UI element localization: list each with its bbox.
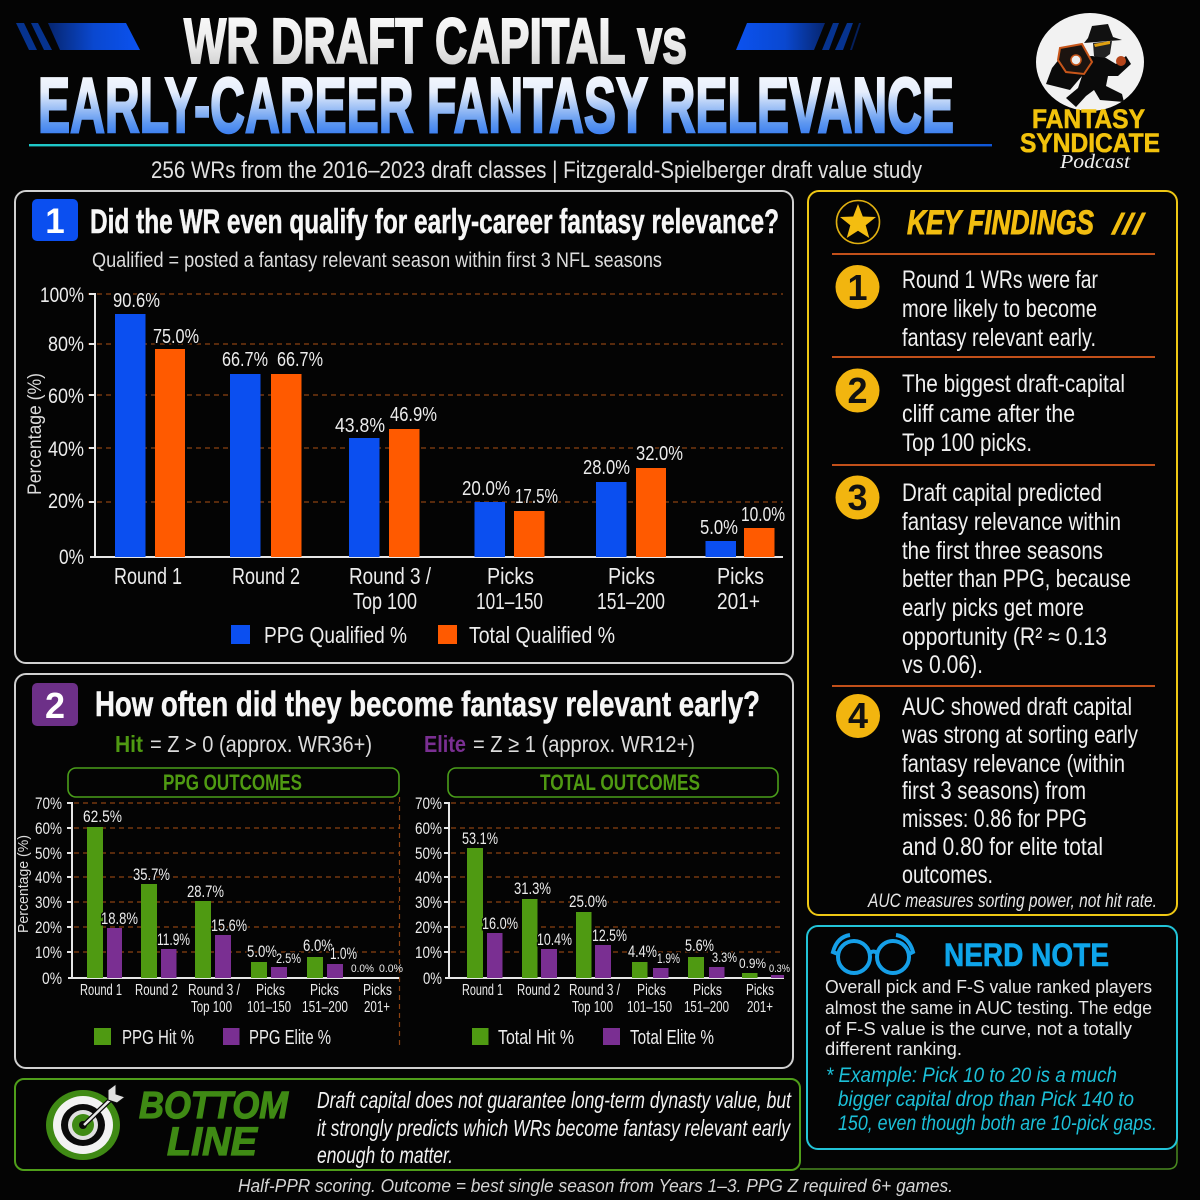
bar chart: PPG outcomes: 50% (35, 844, 62, 863)
bar chart: qualified percentages: 100% (40, 284, 84, 307)
bar chart: total outcomes: 50% (415, 844, 442, 863)
heading: bottom line (139, 1085, 289, 1164)
finding 1: more likely to become (902, 295, 1097, 323)
bar chart: total outcomes (415, 794, 790, 1016)
subtitle: 256 WRs from the 2016–2023 draft classes | Fitzgerald-Spielberger draft value study (151, 157, 922, 184)
bar chart: qualified percentages: Round 2 (232, 563, 300, 589)
finding 4: AUC showed draft capital (902, 693, 1132, 721)
bar chart: qualified percentages: 43.8% (335, 415, 385, 437)
bar chart: total outcomes: 20% (415, 918, 442, 937)
bar chart: qualified percentages: 60% (48, 385, 84, 408)
bar chart: total outcomes: 4.4% (628, 942, 657, 961)
bar chart: total outcomes: 40% (415, 868, 442, 887)
note body: different ranking. (825, 1039, 962, 1059)
bar chart: total outcomes: 16.0% (482, 914, 518, 933)
icon: running spy figure (1046, 24, 1131, 107)
bar chart: total outcomes: 30% (415, 893, 442, 912)
finding 3: vs 0.06). (902, 651, 983, 679)
finding 4: fantasy relevance (within (902, 750, 1125, 778)
bar chart: PPG outcomes: 40% (35, 868, 62, 887)
bar chart: PPG outcomes: Round 3 / (188, 982, 241, 999)
bar chart: qualified percentages: Round 3 / (349, 563, 431, 589)
bar chart: total outcomes: 70% (415, 794, 442, 813)
legend: total outcomes (472, 1027, 714, 1049)
panel: key findings (808, 191, 1177, 915)
bar chart: total outcomes: 0% (423, 969, 442, 988)
finding 1: Round 1 WRs were far (902, 266, 1098, 294)
note body: of F-S value is the curve, not a totally (825, 1019, 1132, 1039)
bar chart: qualified percentages: Picks (487, 563, 534, 589)
bottom line text: it strongly predicts which WRs become fantasy relevant early (317, 1115, 791, 1141)
bar chart: qualified percentages: Top 100 (353, 588, 417, 614)
icon: glasses (833, 935, 913, 973)
bar chart: PPG outcomes: 201+ (364, 999, 390, 1016)
decorative slashes: /// (1110, 208, 1146, 241)
bar chart: qualified percentages: 5.0% (700, 517, 738, 539)
finding 4: was strong at sorting early (901, 721, 1138, 749)
bar chart: qualified percentages: 101–150 (476, 588, 543, 614)
legend: PPG outcomes: PPG Hit % (122, 1027, 194, 1049)
bar chart: qualified percentages: Percentage (%) (25, 373, 46, 495)
finding 4: outcomes. (902, 861, 993, 889)
bar chart: qualified percentages: Picks (717, 563, 764, 589)
bar chart: total outcomes: Top 100 (572, 999, 613, 1016)
bar chart: total outcomes: 0.3% (769, 963, 790, 975)
bar chart: qualified percentages: 151–200 (597, 588, 665, 614)
bar chart: total outcomes: 151–200 (684, 999, 729, 1016)
bar chart: total outcomes: 201+ (747, 999, 773, 1016)
finding 2: The biggest draft-capital (902, 370, 1125, 398)
panel: bottom line (15, 1079, 1177, 1170)
chart legend (231, 622, 615, 648)
bar chart: PPG outcomes: 2.5% (276, 950, 301, 966)
bar chart: qualified percentages: Round 1 (114, 563, 182, 589)
bar chart: PPG outcomes: 35.7% (133, 865, 170, 884)
heading: section 2: How often did they become fantasy relevant early? (95, 685, 760, 724)
bar chart: PPG outcomes: 28.7% (187, 882, 224, 901)
bar chart: total outcomes: 3.3% (712, 949, 737, 965)
bar chart: qualified percentages: 80% (48, 333, 84, 356)
note body: Overall pick and F-S value ranked players (825, 977, 1152, 997)
bar chart: PPG outcomes: Round 2 (135, 982, 178, 999)
finding 3: Draft capital predicted (902, 479, 1102, 507)
note body (825, 977, 1152, 1059)
finding 2: Top 100 picks. (902, 429, 1032, 457)
finding 4 (836, 693, 1138, 889)
legend: total outcomes: Total Hit % (498, 1027, 574, 1049)
panel: hit and elite outcomes (15, 674, 793, 1068)
title underline (29, 144, 992, 146)
bottom line text (317, 1087, 792, 1168)
bar chart: qualified percentages: 28.0% (583, 457, 630, 479)
bar chart: PPG outcomes: 101–150 (247, 999, 291, 1016)
bar chart: qualified percentages: 66.7% (222, 349, 268, 371)
finding 4: 4 (848, 695, 868, 736)
bar chart: PPG outcomes: 11.9% (157, 930, 190, 949)
bar chart: qualified percentages: Picks (608, 563, 655, 589)
bar chart: qualified percentages: 90.6% (113, 290, 160, 312)
bar chart: qualified percentages: 46.9% (390, 404, 437, 426)
bar chart: qualified percentages: 75.0% (153, 326, 199, 348)
definition: hit: Hit (115, 731, 143, 757)
bar chart: qualified percentages: 40% (48, 438, 84, 461)
bar chart: PPG outcomes: 60% (35, 819, 62, 838)
bar chart: PPG outcomes: Percentage (%) (15, 835, 32, 933)
bar chart: total outcomes: 10.4% (537, 930, 572, 949)
bar chart: PPG outcomes (15, 794, 403, 1048)
bar chart: PPG outcomes: 151–200 (302, 999, 348, 1016)
finding 3: 3 (847, 477, 868, 518)
finding 3: the first three seasons (902, 537, 1103, 565)
bar chart: PPG outcomes: 20% (35, 918, 62, 937)
bottom line text: Draft capital does not guarantee long-term dynasty value, but (317, 1087, 792, 1113)
bar chart: total outcomes: 60% (415, 819, 442, 838)
bar chart: total outcomes: Picks (746, 982, 774, 999)
finding 1: fantasy relevant early. (902, 324, 1096, 352)
bar chart: PPG outcomes: Picks (256, 982, 285, 999)
heading: section 1: Did the WR even qualify for early-career fantasy relevance? (90, 203, 779, 241)
bar chart: PPG outcomes: 30% (35, 893, 62, 912)
heading: nerd note: NERD NOTE (944, 937, 1109, 973)
logo: Fantasy Syndicate Podcast: FANTASY (1032, 104, 1145, 134)
finding 3: fantasy relevance within (902, 508, 1121, 536)
bar chart: qualified percentages: 17.5% (515, 486, 558, 508)
header: right accent slashes (736, 23, 861, 50)
note example: * Example: Pick 10 to 20 is a much (826, 1064, 1117, 1087)
legend: PPG outcomes (94, 1027, 331, 1049)
badge: section 2 (32, 683, 78, 726)
bar chart: PPG outcomes: 0.0% (351, 963, 374, 975)
bar chart: total outcomes: 101–150 (627, 999, 672, 1016)
badge: section 1 (32, 199, 78, 241)
bar chart: total outcomes: 12.5% (592, 926, 627, 945)
bar chart: qualified percentages: 20.0% (462, 478, 510, 500)
bar chart: total outcomes: Round 1 (462, 982, 503, 999)
bar chart: qualified percentages: 66.7% (277, 349, 323, 371)
bar chart: PPG outcomes: 70% (35, 794, 62, 813)
bar chart: total outcomes: Picks (637, 982, 666, 999)
bar chart: total outcomes: 0.9% (739, 955, 766, 971)
finding 3: better than PPG, because (902, 565, 1131, 593)
bar chart: PPG outcomes: 1.0% (330, 944, 357, 963)
bar chart: PPG outcomes: 0.0% (379, 963, 403, 975)
finding 2: 2 (847, 370, 868, 411)
bar chart: qualified percentages: 0% (59, 546, 84, 569)
bar chart: qualified percentages: 201+ (717, 588, 760, 614)
legend: total outcomes: Total Elite % (630, 1027, 714, 1049)
bar chart: total outcomes: 10% (415, 943, 442, 962)
bottom line text: enough to matter. (317, 1142, 453, 1168)
bar chart: PPG outcomes: Top 100 (191, 999, 232, 1016)
logo: Fantasy Syndicate Podcast (1020, 13, 1160, 173)
finding 3 (836, 476, 1131, 679)
bar chart: total outcomes: 25.0% (569, 892, 607, 911)
bar chart: PPG outcomes: 10% (35, 943, 62, 962)
icon: target with arrow (46, 1084, 125, 1160)
definition: elite: Elite (424, 731, 466, 757)
note example (826, 1064, 1157, 1135)
note example: bigger capital drop than Pick 140 to (838, 1088, 1134, 1111)
chart legend: Total Qualified % (469, 622, 615, 648)
bar chart: total outcomes: 31.3% (514, 879, 551, 898)
finding 4: and 0.80 for elite total (902, 833, 1103, 861)
legend: PPG outcomes: PPG Elite % (249, 1027, 331, 1049)
bar chart: qualified percentages: 10.0% (741, 504, 785, 526)
bar chart: total outcomes: Picks (693, 982, 722, 999)
heading: bottom line: BOTTOM (139, 1085, 289, 1127)
subpanel: total outcomes header: TOTAL OUTCOMES (540, 770, 700, 795)
finding 4: misses: 0.86 for PPG (902, 805, 1087, 833)
finding 4: first 3 seasons) from (902, 777, 1086, 805)
bar chart: PPG outcomes: Picks (363, 982, 392, 999)
title (38, 5, 954, 149)
footer note: Half-PPR scoring. Outcome = best single season from Years 1–3. PPG Z required 6+ games. (238, 1176, 953, 1196)
bar chart: total outcomes: 1.9% (657, 950, 680, 966)
bar chart: PPG outcomes: Picks (310, 982, 339, 999)
bar chart: PPG outcomes: 62.5% (83, 807, 122, 826)
definition: elite: = Z ≥ 1 (approx. WR12+) (473, 731, 695, 757)
bar chart: PPG outcomes: Round 1 (80, 982, 122, 999)
bar chart: PPG outcomes: 5.0% (247, 942, 277, 961)
bar chart: qualified percentages: 20% (48, 490, 84, 513)
heading: bottom line: LINE (167, 1120, 258, 1164)
panel: qualification chart (15, 191, 793, 663)
chart legend: PPG Qualified % (264, 622, 407, 648)
panel: nerd note (807, 926, 1177, 1149)
finding 2 (836, 368, 1125, 457)
subpanel: PPG outcomes header: PPG OUTCOMES (163, 770, 302, 795)
finding 2: cliff came after the (902, 400, 1075, 428)
subpanel: total outcomes header (448, 768, 778, 797)
logo: Fantasy Syndicate Podcast: SYNDICATE (1020, 128, 1160, 158)
badge: section 2: 2 (45, 685, 65, 726)
bar chart: total outcomes: Round 3 / (569, 982, 621, 999)
bar chart: PPG outcomes: 15.6% (211, 916, 247, 935)
note body: almost the same in AUC testing. The edge (825, 998, 1152, 1018)
bar chart: PPG outcomes: 18.8% (101, 909, 138, 928)
bar chart: PPG outcomes: 0% (42, 969, 62, 988)
bar chart: qualified percentages (25, 284, 785, 614)
bar chart: PPG outcomes: 6.0% (303, 936, 333, 955)
finding 3: opportunity (R² ≈ 0.13 (902, 623, 1107, 651)
bar chart: total outcomes: 5.6% (685, 936, 714, 955)
title: WR DRAFT CAPITAL vs (184, 5, 687, 77)
definition text: Qualified = posted a fantasy relevant season within first 3 NFL seasons (92, 249, 662, 272)
finding 1: 1 (847, 267, 868, 308)
definition: hit: = Z > 0 (approx. WR36+) (150, 731, 372, 757)
badge: section 1: 1 (45, 202, 65, 241)
header: left accent slashes (16, 23, 140, 50)
finding 3: early picks get more (902, 594, 1084, 622)
subpanel: PPG outcomes header (68, 768, 399, 797)
icon: star badge (836, 200, 880, 244)
logo: Fantasy Syndicate Podcast: Podcast (1059, 151, 1130, 173)
finding 1 (836, 265, 1098, 352)
heading: key findings: KEY FINDINGS (907, 204, 1094, 242)
bar chart: total outcomes: Round 2 (517, 982, 560, 999)
bar chart: qualified percentages: 32.0% (636, 443, 683, 465)
bar chart: total outcomes: 53.1% (462, 829, 498, 848)
